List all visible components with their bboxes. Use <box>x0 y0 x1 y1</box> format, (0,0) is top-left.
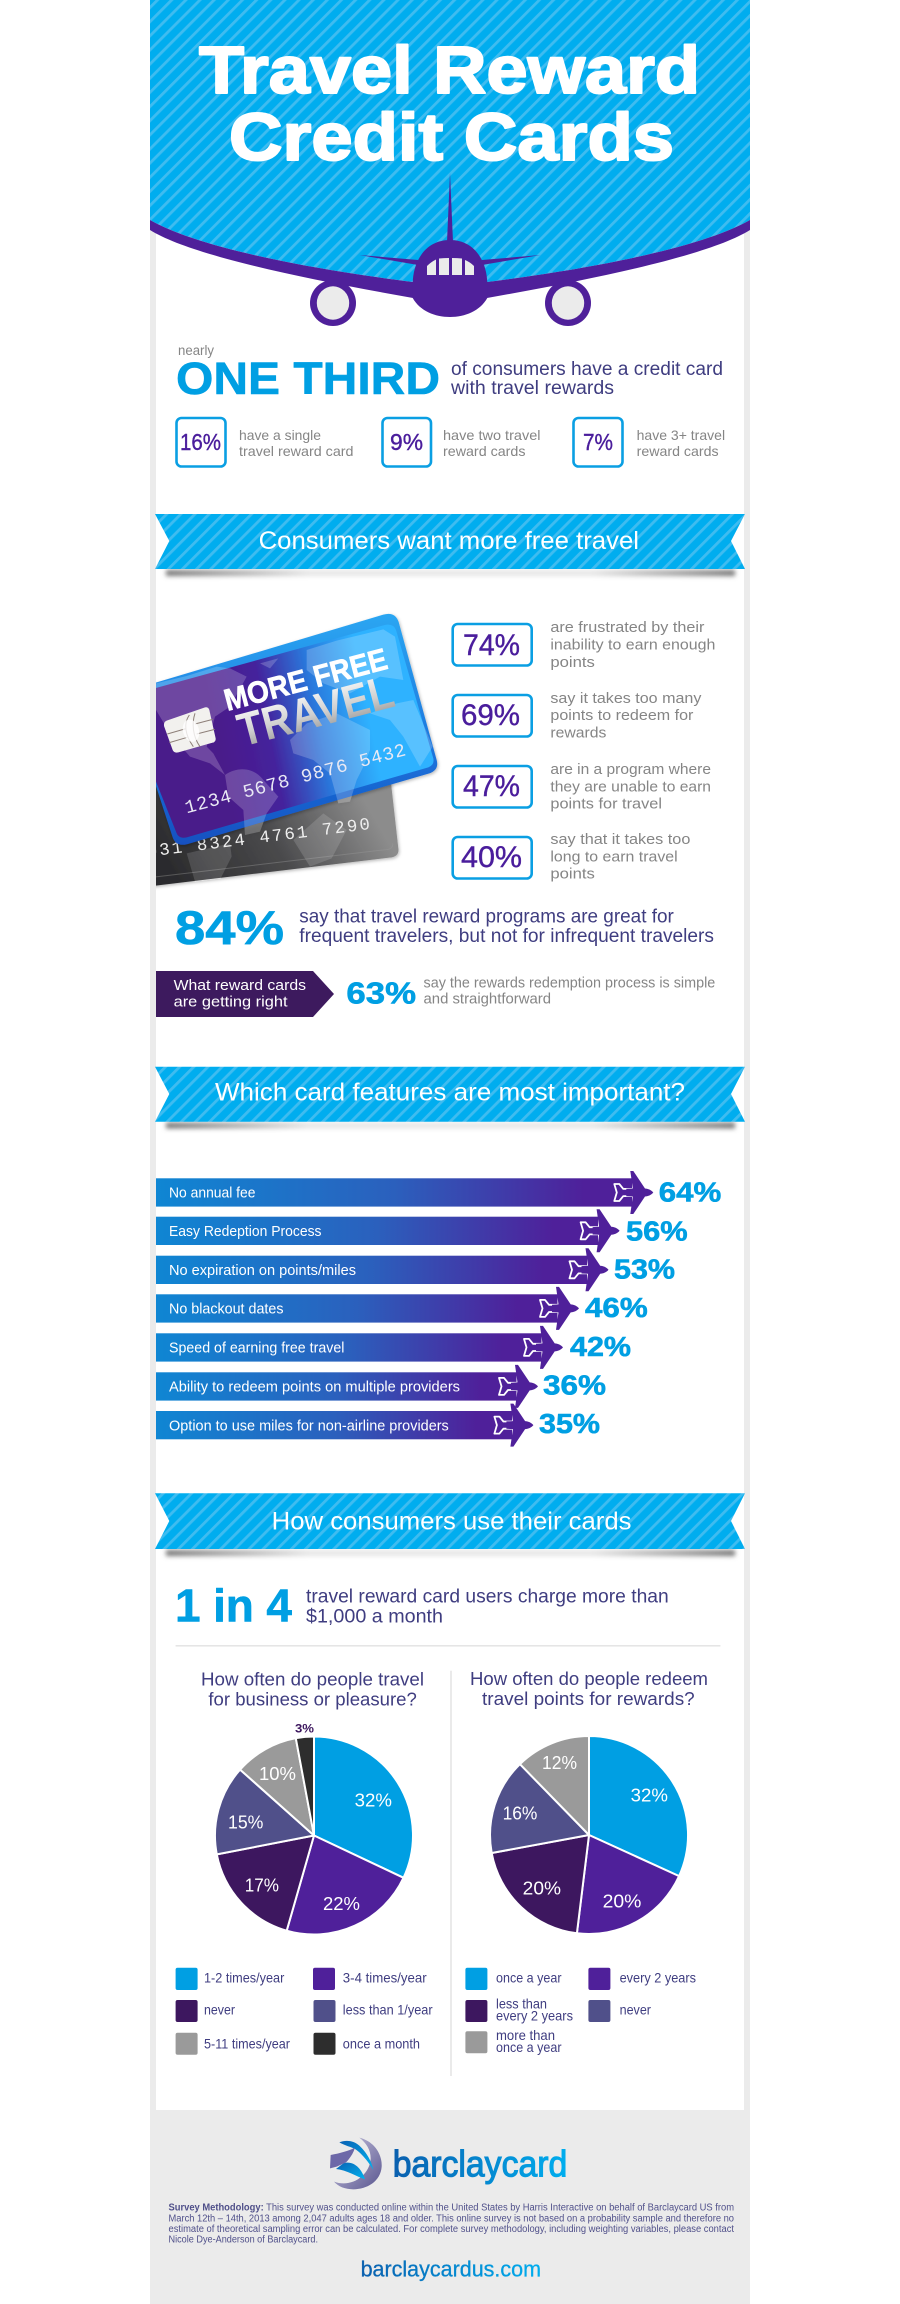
pie labels <box>503 1753 668 1912</box>
63% description: and straightforward <box>424 992 551 1008</box>
bar: speed of earning <box>156 1326 631 1369</box>
purple arrow tag: What reward cards <box>174 977 306 994</box>
stat 69%: points to redeem for <box>550 708 694 724</box>
bar: no expiration: No expiration on points/miles <box>169 1263 356 1279</box>
survey methodology: Nicole Dye-Anderson of Barclaycard. <box>168 2235 318 2246</box>
left engine <box>310 280 356 326</box>
one in four statistic: travel reward card users charge more than <box>306 1586 669 1607</box>
what reward cards are getting right <box>156 971 715 1017</box>
header banner <box>150 0 750 326</box>
stat 47% <box>453 762 711 813</box>
stat 9%: have two travel <box>443 427 540 443</box>
bar: non-airline providers: Option to use miles for non-airline providers <box>169 1418 449 1434</box>
survey methodology: March 12th – 14th, 2013 among 2,047 adults ages 18 and older. This online survey is not based on a probability sample and therefore no <box>168 2213 734 2224</box>
fuselage <box>413 240 487 317</box>
pie legend: less than <box>496 1995 547 2011</box>
barclaycard logo <box>330 2138 567 2189</box>
stat 74% <box>453 620 715 671</box>
stat 7%: have 3+ travel <box>637 427 725 443</box>
bar: no annual fee <box>156 1171 721 1214</box>
pie heading <box>201 1669 424 1710</box>
logo wordmark: barclaycard <box>393 2144 567 2185</box>
bar: no blackout dates: No blackout dates <box>169 1302 284 1318</box>
stat 74%: inability to earn enough <box>550 638 715 654</box>
pie labels: 20% <box>603 1892 641 1912</box>
stat 69%: 69% <box>461 699 520 732</box>
icon: logo globe <box>330 2138 382 2189</box>
stat 40% <box>453 832 690 883</box>
bar: easy redemption process: Easy Redeption Process <box>169 1224 322 1240</box>
84 percent statistic: say that travel reward programs are great for <box>299 906 674 928</box>
bar: speed of earning: Speed of earning free travel <box>169 1341 344 1357</box>
tail fin <box>447 173 453 242</box>
bar: non-airline providers <box>156 1404 600 1447</box>
bar: no annual fee: 64% <box>659 1176 721 1207</box>
one third statistic <box>176 343 723 404</box>
credit cards illustration <box>130 614 437 889</box>
stat 40%: 40% <box>461 841 522 874</box>
card heading <box>224 648 396 744</box>
survey methodology <box>168 2203 734 2246</box>
pie legend: once a year <box>496 2039 562 2055</box>
pie legend: 1-2 times/year <box>204 1970 285 1986</box>
bar: multiple providers <box>156 1365 606 1408</box>
pie legend: every 2 years <box>496 2008 573 2024</box>
stat 40%: points <box>550 867 595 883</box>
stat 47%: points for travel <box>550 797 662 813</box>
stat 74%: 74% <box>463 629 520 662</box>
stat 9%: 9% <box>390 429 423 455</box>
stat 69%: say it takes too many <box>550 691 702 707</box>
stat 69%: rewards <box>550 726 606 742</box>
pie legend: less than 1/year <box>343 2002 433 2018</box>
world map <box>156 629 433 835</box>
section banner: which card features are most important <box>155 1067 745 1128</box>
purple arrow tag: are getting right <box>174 993 289 1010</box>
nearly label: nearly <box>178 343 214 358</box>
one in four statistic: 1 in 4 <box>175 1580 292 1632</box>
pie heading: How often do people redeem <box>470 1668 708 1689</box>
stat 7%: reward cards <box>637 443 719 459</box>
pie legend: once a year <box>496 1970 562 1986</box>
pie labels <box>228 1722 392 1914</box>
pie labels: 32% <box>631 1786 668 1806</box>
pie labels: 3% <box>295 1722 314 1736</box>
bar: no annual fee: No annual fee <box>169 1186 256 1202</box>
pie labels: 10% <box>259 1764 296 1784</box>
section banner: how consumers use their cards: How consumers use their cards <box>272 1507 632 1535</box>
pie labels: 16% <box>503 1803 537 1823</box>
pie labels: 32% <box>355 1791 392 1811</box>
stat 40%: long to earn travel <box>550 849 678 865</box>
stat 16%: have a single <box>239 427 321 443</box>
pie legend: 3-4 times/year <box>343 1970 427 1986</box>
bar: easy redemption process <box>156 1209 688 1252</box>
pie legend: more than <box>496 2027 555 2043</box>
stat 16%: 16% <box>180 429 221 455</box>
card chip <box>164 707 216 753</box>
card number: 1234 5678 9876 5432 <box>183 740 408 819</box>
one third description: with travel rewards <box>450 378 614 399</box>
pie legend: 5-11 times/year <box>204 2036 290 2052</box>
website url: barclaycardus.com <box>361 2257 541 2282</box>
stat 47%: are in a program where <box>550 762 711 778</box>
stat 63%: 63% <box>346 976 416 1011</box>
84 percent statistic: frequent travelers, but not for infrequent travelers <box>299 926 714 947</box>
bar: non-airline providers: 35% <box>539 1408 600 1439</box>
pie chart <box>215 1736 413 1935</box>
pie chart <box>490 1736 688 1934</box>
pie legend: once a month <box>343 2036 420 2052</box>
wings <box>150 220 750 298</box>
stat 7%: 7% <box>583 429 613 455</box>
section banner: consumers want more free travel: Consumers want more free travel <box>259 527 639 555</box>
title: Credit Cards <box>229 100 674 175</box>
one in four statistic <box>175 1580 669 1632</box>
pie labels: 17% <box>245 1876 279 1896</box>
stat 9% <box>382 418 540 466</box>
card ownership stats <box>176 418 725 466</box>
bar: easy redemption process: 56% <box>626 1216 688 1247</box>
stat 7% <box>574 418 725 466</box>
pie legend <box>176 1968 433 2055</box>
pie heading: travel points for rewards? <box>482 1688 695 1709</box>
pie labels: 12% <box>542 1753 577 1773</box>
pie heading <box>470 1668 708 1709</box>
title: Travel Reward <box>199 33 700 108</box>
bar: no blackout dates: 46% <box>585 1292 648 1323</box>
pie legend: never <box>204 2002 235 2018</box>
grey card <box>156 784 401 889</box>
cockpit windows <box>427 258 474 275</box>
63% description: say the rewards redemption process is simple <box>424 976 715 992</box>
pie labels: 15% <box>228 1812 263 1832</box>
63% description <box>424 976 715 1008</box>
stat 47%: 47% <box>463 770 520 803</box>
pie legend: never <box>620 2002 651 2018</box>
pie labels: 20% <box>523 1878 561 1898</box>
icon: airplane front view <box>150 173 750 326</box>
one in four statistic: $1,000 a month <box>306 1606 443 1627</box>
survey methodology: estimate of theoretical sampling error can be calculated. For complete survey methodology, including weighting variables, please contact <box>168 2224 734 2235</box>
right engine <box>545 280 591 326</box>
card heading: MORE FREE <box>220 642 391 718</box>
pie panel: redemption frequency <box>465 1668 708 2055</box>
survey methodology: Survey Methodology: This survey was conducted online within the United States by Harris Interactive on behalf of Barclaycard US from <box>168 2203 734 2214</box>
stat 16% <box>176 418 354 466</box>
title <box>199 33 700 175</box>
pie legend <box>465 1968 696 2055</box>
one third description <box>450 359 723 399</box>
bar: multiple providers: Ability to redeem points on multiple providers <box>169 1380 460 1396</box>
header striped sky <box>150 0 750 282</box>
frustration statistics <box>453 620 715 883</box>
bar: no expiration <box>156 1248 675 1291</box>
stat 47%: they are unable to earn <box>550 779 711 795</box>
bar: multiple providers: 36% <box>543 1370 606 1401</box>
tail stabilizers <box>360 255 540 265</box>
bar: no expiration: 53% <box>614 1254 675 1285</box>
page background column <box>150 0 750 2304</box>
bar chart: card features <box>156 1171 721 1447</box>
stat 74%: are frustrated by their <box>550 620 705 636</box>
stat 74%: points <box>550 655 595 671</box>
pie legend: every 2 years <box>620 1970 696 1986</box>
stat 69% <box>453 691 702 742</box>
stat 9%: reward cards <box>443 443 526 459</box>
bar: speed of earning: 42% <box>570 1331 631 1362</box>
pie heading: for business or pleasure? <box>208 1689 417 1710</box>
84 percent statistic: 84% <box>175 901 284 954</box>
pie panel: travel frequency <box>176 1669 433 2055</box>
blue card <box>137 614 437 845</box>
one third description: of consumers have a credit card <box>451 359 723 380</box>
card heading: TRAVEL <box>232 665 399 756</box>
footer <box>168 2138 734 2282</box>
section banner: consumers want more free travel <box>155 514 745 576</box>
stat 16%: travel reward card <box>239 443 354 459</box>
grey card: 5031 8324 4761 7290 <box>133 816 371 864</box>
one third heading: ONE THIRD <box>176 353 440 404</box>
section banner: how consumers use their cards <box>155 1493 745 1556</box>
pie heading: How often do people travel <box>201 1669 424 1690</box>
purple arrow tag <box>156 971 334 1017</box>
stat 40%: say that it takes too <box>550 832 690 848</box>
bar: no blackout dates <box>156 1287 648 1330</box>
84 percent statistic <box>175 901 714 954</box>
section banner: which card features are most important: Which card features are most important? <box>215 1079 685 1107</box>
pie labels: 22% <box>323 1894 360 1914</box>
